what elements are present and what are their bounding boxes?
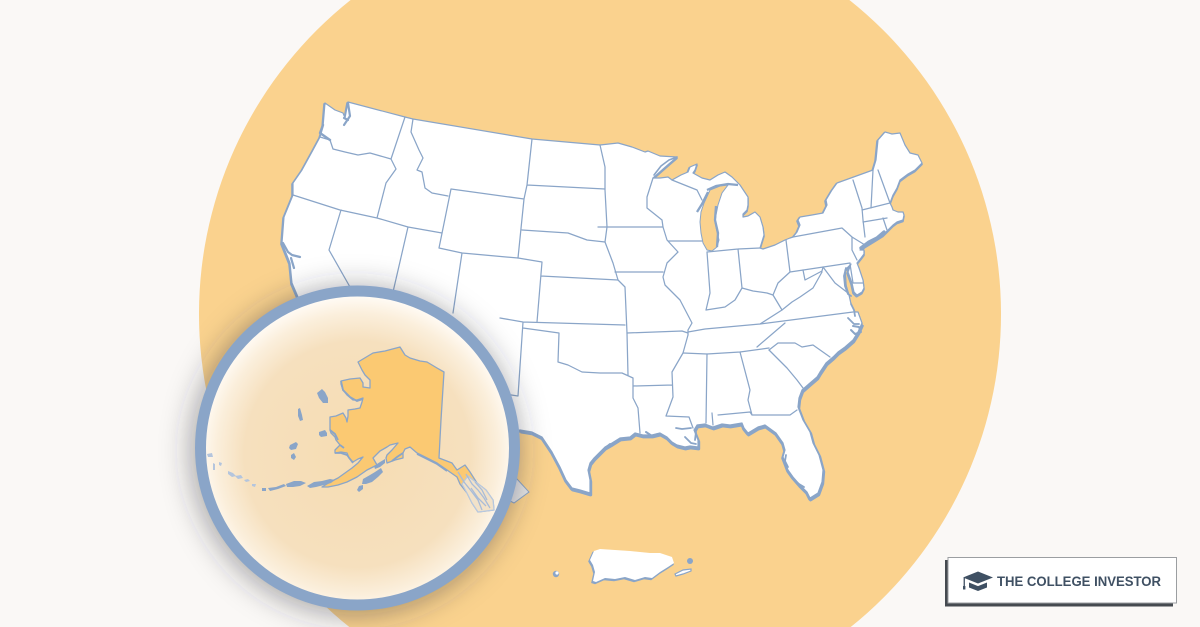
logo badge	[945, 558, 1176, 606]
icon: graduation cap	[963, 572, 993, 591]
southern coast thickening	[521, 325, 863, 500]
panhandle islands	[458, 472, 494, 512]
puerto rico	[553, 549, 693, 584]
magnifier lens	[200, 291, 514, 605]
map: contiguous united states	[282, 102, 922, 500]
alaska	[207, 347, 494, 512]
aleutian islands	[262, 389, 385, 492]
hawaii	[508, 479, 529, 503]
coastal detail	[283, 103, 884, 487]
magnifier shadow	[191, 287, 519, 615]
logo wordmark: THE COLLEGE INVESTOR	[997, 574, 1161, 589]
state borders	[293, 117, 890, 433]
coast shadow	[282, 103, 922, 499]
great lakes: michigan	[700, 185, 728, 251]
orange circle backdrop	[199, 0, 1001, 627]
land	[282, 102, 922, 498]
lake shores	[697, 184, 738, 247]
